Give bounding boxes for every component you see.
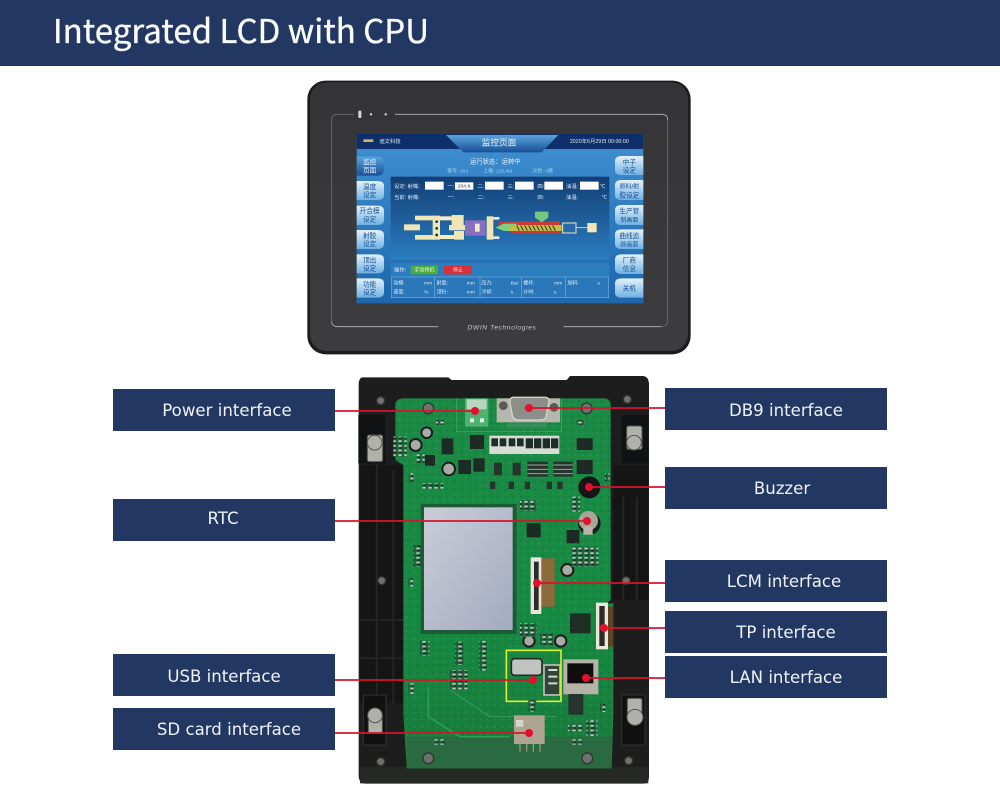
left menu buttons: 顶出 <box>363 255 376 264</box>
electrolytic capacitors and power chips <box>410 427 593 576</box>
USB ports highlight <box>506 650 561 701</box>
temperature panel: 油温: <box>566 182 578 190</box>
right menu buttons: 踪画面 <box>620 240 638 248</box>
temperature panel: ℃ <box>602 194 608 201</box>
label: DB9 interface <box>665 388 887 430</box>
right menu buttons: 制画面 <box>620 216 638 224</box>
lower capacitors <box>523 635 566 647</box>
left menu buttons: 温度 <box>363 182 377 191</box>
right menu buttons: 中子 <box>623 157 636 166</box>
operation and status panel: 停止 <box>453 267 463 274</box>
temperature panel: 204.8 <box>458 184 470 190</box>
power connector <box>465 398 488 427</box>
right menu buttons: 生产管 <box>619 206 640 215</box>
operation and status panel: mm <box>424 280 432 286</box>
label: LCM interface: LCM interface <box>727 572 841 591</box>
operation and status panel: s <box>511 289 514 295</box>
right menu buttons: 原料/射 <box>620 183 639 191</box>
left menu buttons: 功能 <box>363 280 377 289</box>
label: SD card interface <box>113 708 335 750</box>
temperature panel: 油温: <box>566 193 578 201</box>
RTC battery <box>527 511 601 543</box>
operation and status panel: 手动待机 <box>414 267 434 274</box>
brand text: DWIN Technologies <box>467 324 537 331</box>
operation and status panel: 操作: <box>394 266 406 274</box>
operation and status panel: mm <box>467 289 475 295</box>
temperature panel: 当前: 射嘴: <box>394 193 420 201</box>
CPU metal shield <box>421 504 517 634</box>
callout: SD card <box>335 729 533 737</box>
right menu buttons: 设定 <box>623 165 636 174</box>
printed circuit board <box>395 398 613 768</box>
SD card slot <box>514 715 545 752</box>
label: SD card interface: SD card interface <box>157 720 301 739</box>
right menu buttons: 曲线追 <box>619 231 640 240</box>
label: TP interface: TP interface <box>735 623 836 642</box>
operation and status panel: 螺杆: <box>523 279 535 286</box>
operation and status panel: 射胶: <box>437 279 448 286</box>
operation and status panel: mm <box>467 280 475 286</box>
operation and status panel: s <box>597 280 600 286</box>
temperature panel: 二: <box>477 195 484 201</box>
temperature panel: ℃ <box>600 183 606 190</box>
buzzer <box>578 476 600 498</box>
product front view: LCD panel <box>307 81 691 354</box>
operation and status panel: % <box>424 289 429 295</box>
DB9 connector <box>497 397 560 427</box>
screen: 迪文科技 <box>379 137 401 145</box>
left menu buttons: 射胶 <box>363 231 377 240</box>
screen: 运行状态：运转中 <box>470 156 521 165</box>
left menu buttons <box>357 157 384 298</box>
operation and status panel <box>391 263 609 298</box>
temperature panel <box>391 177 609 260</box>
IC rows <box>393 420 610 587</box>
label: Power interface: Power interface <box>162 401 292 420</box>
temperature panel: 二: <box>477 184 484 190</box>
operation and status panel: s <box>554 289 557 295</box>
operation and status panel: 冷却: <box>481 288 493 295</box>
operation and status panel: 动模: <box>393 279 405 286</box>
right menu buttons: 厂商 <box>623 256 636 265</box>
header bar <box>0 0 1000 66</box>
label: RTC <box>113 499 335 541</box>
temperature panel: 三: <box>507 183 514 190</box>
callout lines and dots <box>335 404 665 737</box>
label: TP interface <box>665 611 887 653</box>
temperature panel: 一: <box>447 184 454 190</box>
label: LCM interface <box>665 560 887 602</box>
LAN port <box>563 659 598 715</box>
housing <box>358 376 649 784</box>
main chip <box>570 613 591 633</box>
temperature panel: 三: <box>507 194 514 201</box>
label: LAN interface <box>665 656 887 698</box>
left menu buttons: 监控 <box>363 158 377 167</box>
left menu buttons: 页面 <box>363 167 377 175</box>
product back view: circuit board in housing <box>358 376 649 784</box>
temperature panel: 四: <box>537 183 544 190</box>
TP FPC connector <box>596 603 613 649</box>
LCM FPC connector <box>531 557 555 614</box>
operation and status panel: mm <box>554 280 562 286</box>
temperature panel: 一: <box>447 195 454 201</box>
operation and status panel: Bar <box>511 280 519 286</box>
callout: RTC <box>335 517 591 525</box>
label: LAN interface: LAN interface <box>730 668 842 687</box>
label: DB9 interface: DB9 interface <box>729 401 843 420</box>
screen: 监控页面 <box>482 136 517 147</box>
screen <box>357 133 643 303</box>
left menu buttons: 设定 <box>363 190 377 199</box>
callout: power <box>335 407 479 415</box>
right menu buttons: 信息 <box>623 264 636 273</box>
label: RTC: RTC <box>207 509 239 528</box>
left menu buttons: 设定 <box>363 288 377 297</box>
callout: DB9 <box>525 404 665 412</box>
temperature panel: 设定: 射嘴: <box>394 182 420 190</box>
label: Buzzer: Buzzer <box>754 479 810 498</box>
callout: LCM <box>533 579 665 587</box>
left menu buttons: 设定 <box>363 263 377 272</box>
screen: 2020年6月29日 00:00:00 <box>570 137 629 145</box>
temperature panel: 四: <box>537 194 544 201</box>
left menu buttons: 设定 <box>363 215 377 224</box>
right menu buttons: 关机 <box>623 283 636 292</box>
screen: 模号: 063 上模: 123.4M 次数: 8横 <box>447 168 553 175</box>
right menu buttons: 胶设定 <box>619 190 640 199</box>
label: Power interface <box>113 389 335 431</box>
screws and mounts <box>377 395 633 766</box>
injection machine diagram <box>404 212 597 240</box>
left menu buttons: 开合模 <box>360 206 380 215</box>
operation and status panel: 加料: <box>567 279 579 286</box>
right menu buttons <box>615 156 643 298</box>
small components lower board <box>408 623 605 745</box>
label: Buzzer <box>665 467 887 509</box>
operation and status panel: 计时: <box>523 288 535 295</box>
callout: USB <box>335 676 537 684</box>
callout: buzzer <box>585 483 665 491</box>
operation and status panel: 速度: <box>393 288 405 295</box>
indicator lights <box>358 111 387 118</box>
title: Integrated LCD with CPU <box>53 5 429 53</box>
callout: TP <box>600 624 665 632</box>
operation and status panel: 压力: <box>481 279 493 286</box>
label: USB interface <box>113 654 335 696</box>
left menu buttons: 设定 <box>363 239 377 248</box>
label: USB interface: USB interface <box>167 667 281 686</box>
callout: LAN <box>582 674 665 682</box>
operation and status panel: 顶针: <box>437 288 448 295</box>
